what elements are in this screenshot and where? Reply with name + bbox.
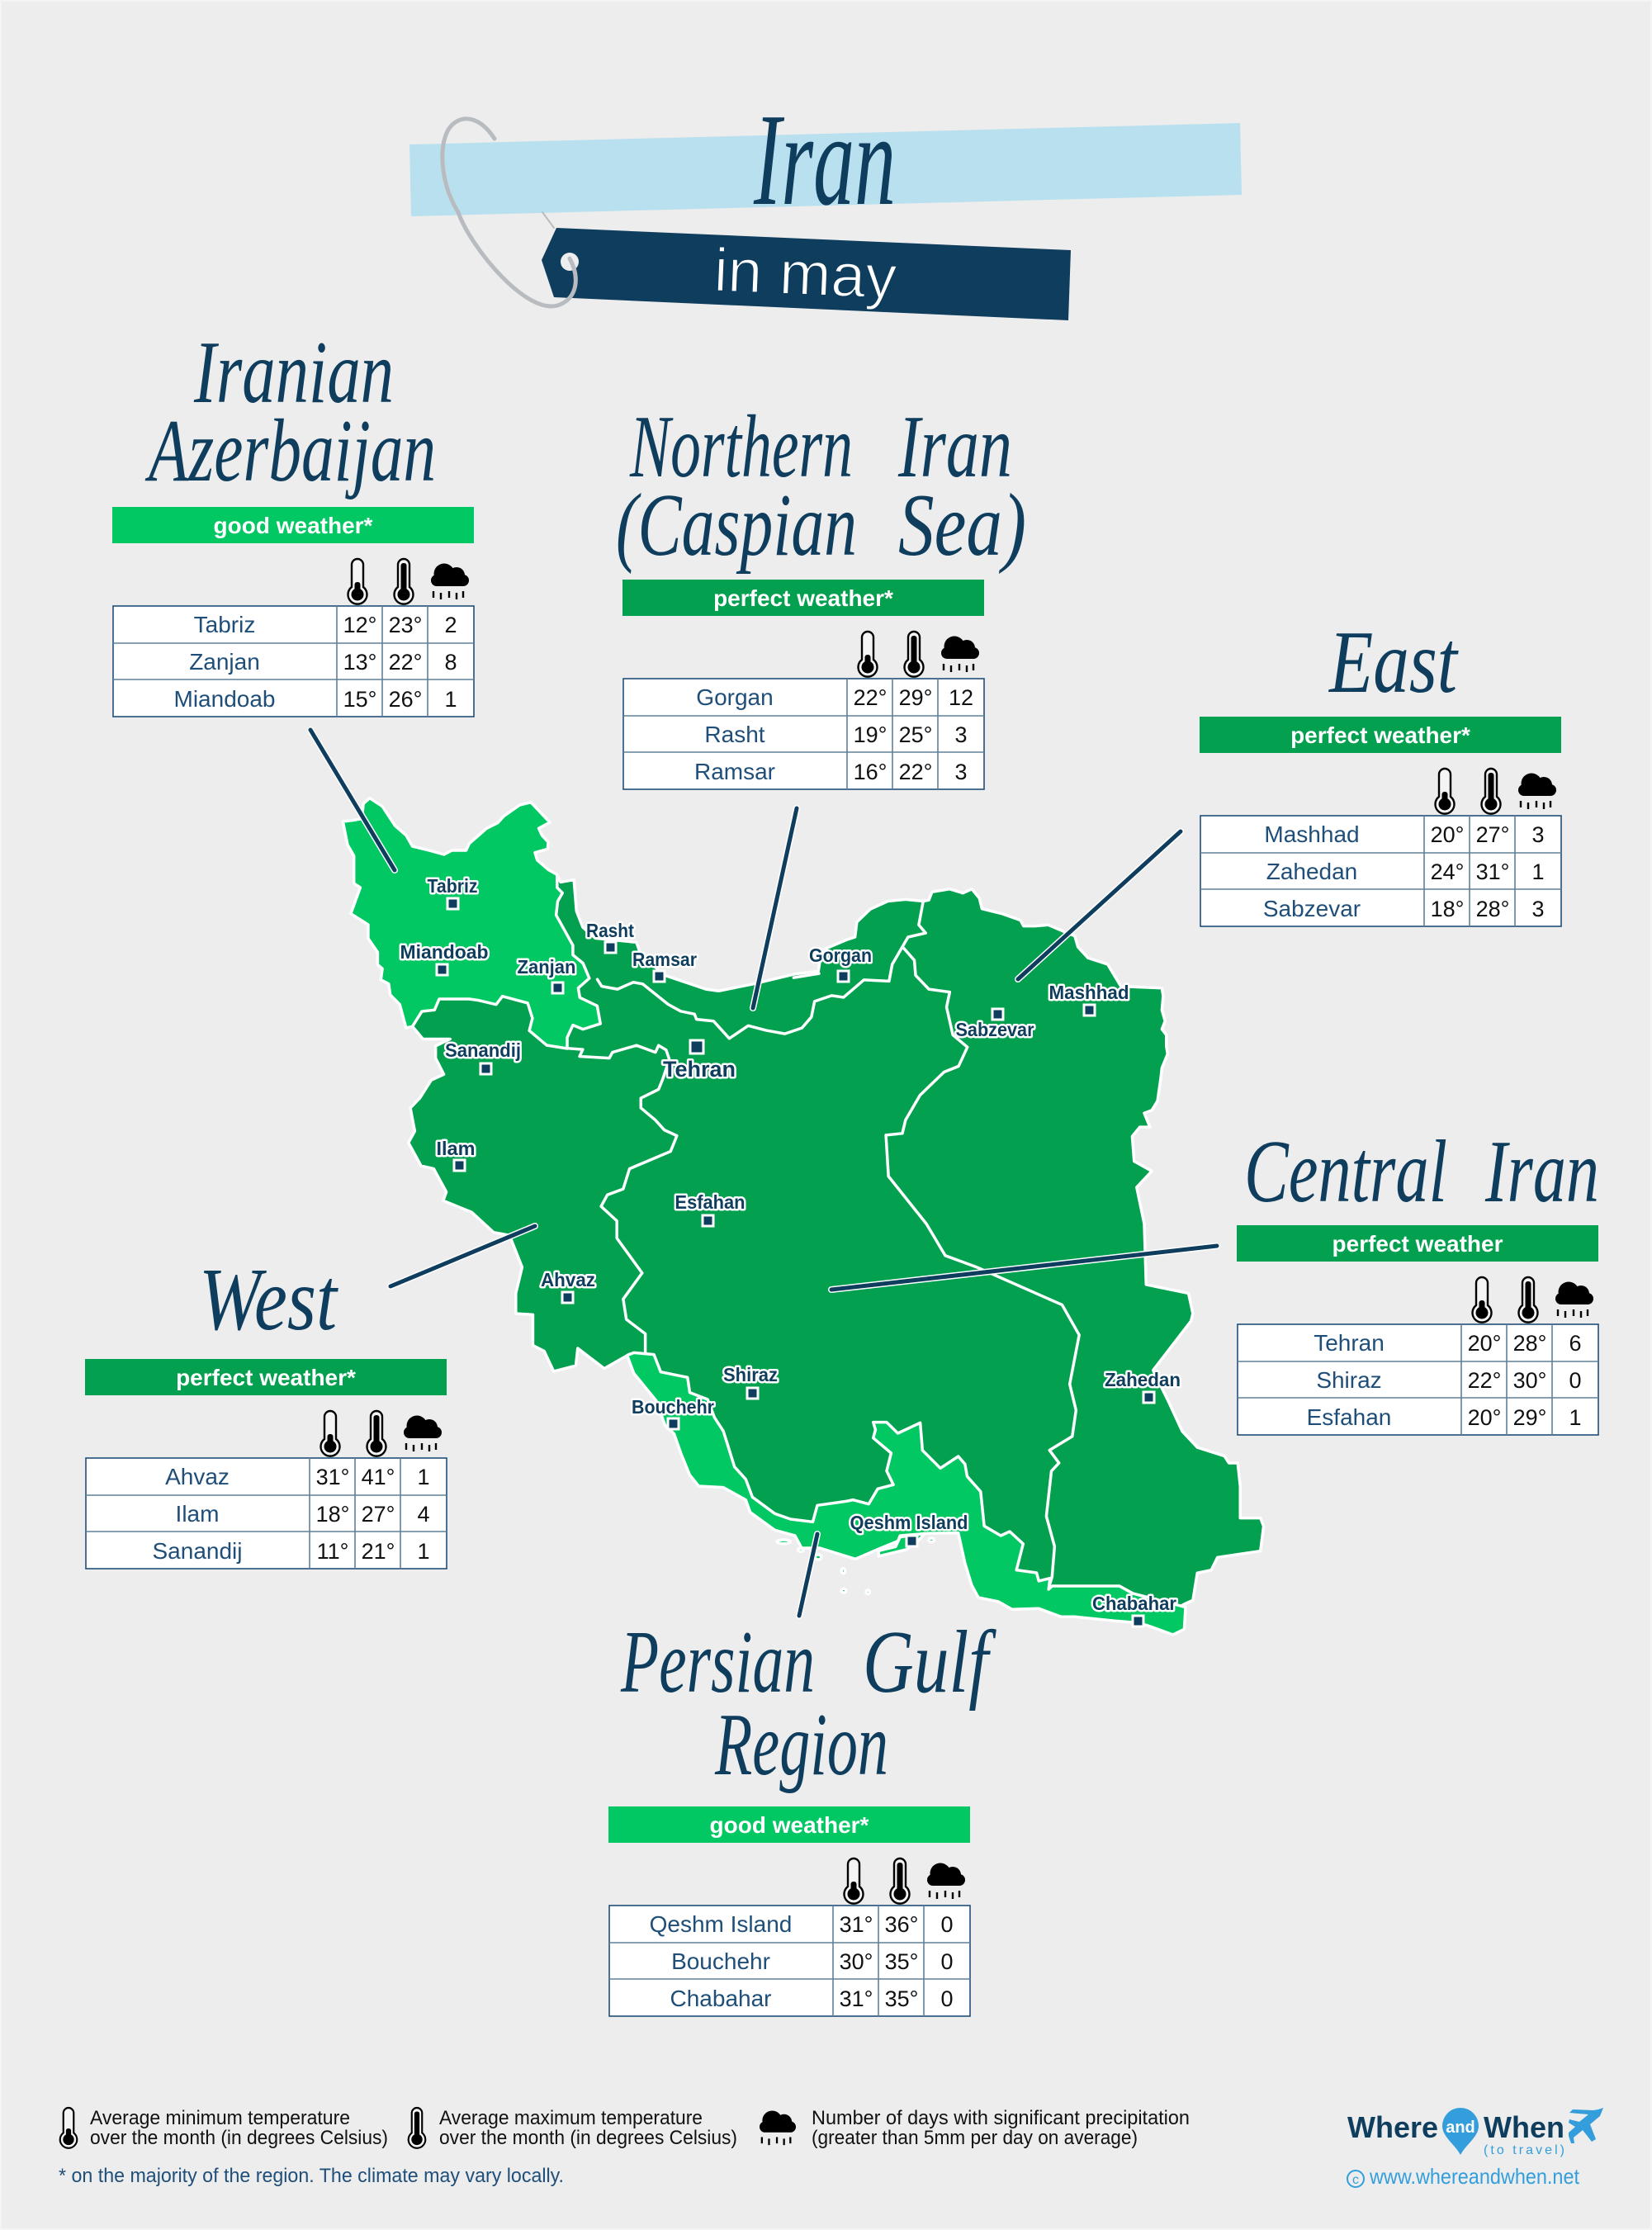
islands [777,1533,934,1594]
weather bar [622,580,984,616]
climate table: Shiraz [1316,1367,1382,1393]
icons [1435,769,1556,814]
icons [844,1858,965,1904]
icons [320,1411,442,1456]
icons [348,559,469,604]
logo: Where and When [1347,2108,1603,2189]
legend item: precipitation: Number of days with significant precipitation [812,2107,1190,2129]
panel: Central Iran [1237,1123,1599,1435]
title banner: Iran in may [409,86,1242,320]
climate table: 3 [954,760,968,784]
border: East and Central [886,948,1079,1589]
Gorgan lagoon sliver [793,973,819,978]
leader: Northern Iran [753,808,797,1008]
climate table: 3 [1531,897,1545,921]
climate table: 1 [1531,859,1545,884]
subtitle: in may: in may [712,235,898,311]
region title: Iranian [193,324,394,422]
weather bar [85,1359,447,1395]
climate table: Ilam [176,1501,219,1527]
climate table [86,1458,447,1569]
leader: Persian Gulf [799,1534,817,1616]
city labels: Shiraz [723,1364,778,1385]
city markers [437,898,1154,1626]
region title [145,324,436,500]
climate table: 11° [317,1539,348,1564]
climate table: 16° [854,760,887,784]
weather bar [112,507,474,543]
climate table: 35° [885,1986,918,2011]
climate table: 30° [1513,1368,1546,1393]
climate table: Sabzevar [1263,896,1361,921]
panel: Iranian Azerbaijan [112,324,474,717]
pin icon: and [1446,2119,1475,2137]
icons [1473,1277,1593,1323]
climate table: 2 [444,613,457,637]
wordmark When: When [1484,2110,1564,2144]
climate table: 1 [417,1465,430,1489]
light green region: Iranian Azerbaijan [343,798,600,1049]
city labels: Esfahan [675,1191,745,1213]
region title: Central [1244,1123,1447,1221]
panel: Persian Gulf Region [608,1613,996,2016]
climate table: 6 [1569,1331,1582,1356]
climate table: Miandoab [174,686,275,712]
climate table: 12° [343,613,376,637]
legend item: precipitation [760,2107,1190,2149]
climate table: 28° [1476,897,1509,921]
region title: Persian [620,1613,815,1712]
climate table: 41° [362,1465,395,1489]
city labels: Qeshm Island [850,1512,968,1533]
weather bar [1237,1225,1598,1262]
legend item: maximum temperature [409,2107,737,2149]
climate table: 1 [1569,1405,1582,1430]
region title: Azerbaijan [145,402,436,500]
climate table: Zahedan [1266,859,1357,884]
climate table [609,1906,970,2016]
region title: Sea) [898,476,1026,575]
legend item: minimum temperature [60,2107,388,2149]
navy luggage tag [542,228,1071,320]
climate table [113,606,474,717]
region title: (Caspian [616,476,857,575]
region title: Gulf [863,1613,996,1712]
climate table: Qeshm Island [650,1911,792,1937]
climate table: Esfahan [1307,1404,1391,1430]
climate table: 35° [885,1949,918,1974]
climate table: 8 [444,650,457,675]
climate table: 0 [940,1986,954,2011]
city labels [400,875,1181,1614]
city labels: Ilam [436,1138,476,1159]
climate table: 31° [840,1912,873,1937]
climate table: 26° [389,687,422,712]
border: Caspian south [597,902,925,1039]
climate table: 29° [1513,1405,1546,1430]
climate table: 13° [343,650,376,675]
leader: Azerbaijan [310,730,395,870]
legend item: minimum temperature: Average minimum temperature [90,2107,350,2129]
region borders [567,902,1079,1589]
city labels: Mashhad [1048,982,1129,1003]
climate table: Gorgan [696,684,774,710]
legend item: maximum temperature: Average maximum temperature [439,2107,703,2129]
city labels: Sabzevar [956,1019,1034,1040]
leader lines [310,730,1217,1616]
climate table: 20° [1431,822,1464,847]
website: c [1352,2173,1359,2187]
panel: East [1200,613,1561,926]
climate table: Chabahar [670,1986,771,2011]
climate table: 31° [1476,859,1509,884]
city labels: Gorgan [809,945,872,966]
weather bar: good weather* [214,513,373,538]
leader: East [1018,831,1181,979]
climate table: 19° [854,722,887,747]
climate table: 12 [949,685,973,710]
city labels: Tehran [663,1057,736,1082]
city labels: Bouchehr [632,1396,714,1418]
climate table: 18° [1431,897,1464,921]
region title: Iran [1484,1123,1599,1221]
legend item: minimum temperature: over the month (in degrees Celsius) [90,2127,388,2149]
city labels: Ramsar [632,949,697,970]
climate table: 15° [343,687,376,712]
tagline: (to travel) [1484,2143,1564,2157]
climate table: 1 [444,687,457,712]
tag string [443,119,575,306]
weather bar: good weather* [710,1812,869,1838]
light green region: Persian Gulf [627,1352,1186,1635]
pin icon [1442,2108,1479,2155]
title: Iran: Iran [753,86,896,233]
climate table: Rasht [704,722,765,747]
region title: Region [714,1696,888,1794]
climate table: 0 [1569,1368,1582,1393]
climate table: 31° [316,1465,349,1489]
legend item: precipitation: (greater than 5mm per day on average) [812,2127,1138,2149]
climate table: Tehran [1314,1330,1385,1356]
climate table: 0 [940,1912,954,1937]
region title: East [1328,613,1459,712]
city labels: Zanjan [517,956,576,978]
leader: Central Iran [831,1246,1217,1290]
climate table: 36° [885,1912,918,1937]
climate table: 0 [940,1949,954,1974]
region title: Northern [629,398,853,496]
climate table: 20° [1468,1405,1501,1430]
legend [59,2107,1190,2187]
climate table: 27° [362,1502,395,1527]
city labels: Sanandij [445,1039,521,1061]
climate table: Ahvaz [165,1464,230,1489]
climate table: 30° [840,1949,873,1974]
climate table [623,679,984,789]
icons [859,632,979,677]
city labels: Tabriz [428,875,477,897]
dark green regions silhouette [409,875,1264,1618]
climate table: 22° [389,650,422,675]
climate table: 21° [362,1539,395,1564]
weather bar [1200,717,1561,753]
climate table: 25° [899,722,932,747]
region title [620,1613,996,1794]
region title: Iran [897,398,1012,496]
border: West and Central [567,1045,677,1354]
region title: West [199,1251,338,1349]
climate table: 29° [899,685,932,710]
region title [616,398,1026,575]
weather bar: perfect weather [1332,1231,1503,1257]
wordmark Where: Where [1347,2110,1438,2144]
climate table [1200,816,1561,926]
climate table: Sanandij [153,1538,242,1564]
climate table: 3 [1531,822,1545,847]
tag hole [561,253,579,271]
plane icon [1569,2108,1603,2143]
climate table: 3 [954,722,968,747]
website: www.whereandwhen.net [1369,2164,1580,2189]
climate table: 28° [1513,1331,1546,1356]
climate table [1238,1324,1598,1435]
legend item: maximum temperature: over the month (in degrees Celsius) [439,2127,737,2149]
climate table: Ramsar [694,759,775,784]
climate table: 27° [1476,822,1509,847]
map of Iran [343,798,1264,1635]
light blue ribbon [409,123,1242,216]
climate table: 1 [417,1539,430,1564]
climate table: 31° [840,1986,873,2011]
climate table: Tabriz [194,612,255,637]
weather bar: perfect weather* [176,1365,356,1390]
climate table: Mashhad [1264,821,1360,847]
climate table: 22° [1468,1368,1501,1393]
weather bar [608,1806,970,1843]
climate table: 18° [316,1502,349,1527]
weather bar: perfect weather* [1290,722,1470,748]
leader: West [391,1226,535,1286]
city labels: Chabahar [1092,1593,1176,1614]
panel: Northern Iran (Caspian Sea) [616,398,1026,789]
city labels: Zahedan [1105,1369,1181,1390]
climate table: Zanjan [189,649,260,675]
footnote: * on the majority of the region. The climate may vary locally. [59,2165,564,2187]
climate table: 24° [1431,859,1464,884]
climate table: 22° [899,760,932,784]
panel: West [85,1251,447,1569]
climate table: 22° [854,685,887,710]
city labels: Rasht [586,920,634,941]
city labels: Ahvaz [541,1269,595,1290]
climate table: 20° [1468,1331,1501,1356]
climate table: Bouchehr [671,1948,770,1974]
climate table: 23° [389,613,422,637]
climate table: 4 [417,1502,430,1527]
weather bar: perfect weather* [713,585,893,611]
city labels: Miandoab [400,941,489,963]
